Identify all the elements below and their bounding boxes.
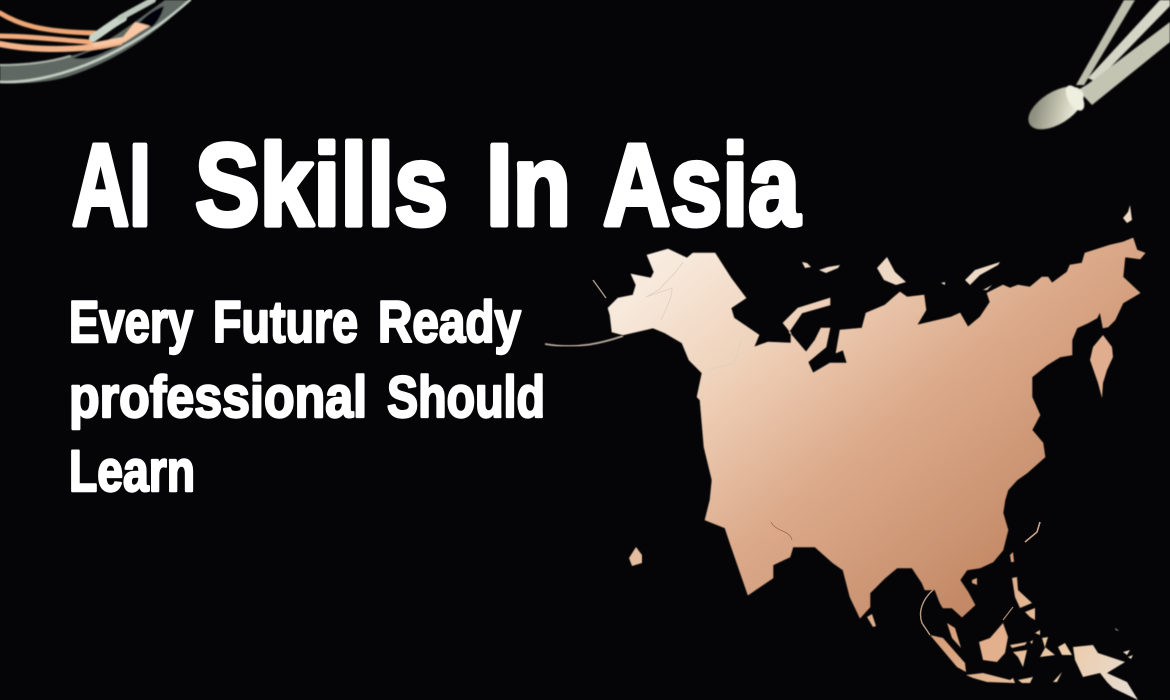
Sakhalin style island [1090,335,1113,398]
small islands near Taiwan and Hainan [972,552,1014,585]
title: Skills [195,120,448,250]
subtitle: Ready [378,290,521,355]
subtitle: Learn [69,439,195,504]
New Guinea [1073,645,1138,700]
map of Asia [545,205,1145,700]
title [72,120,801,250]
Malay Peninsula and Sumatra [930,623,966,672]
decoration: glass tube with orange strands, top left [0,0,190,83]
Madagascar style island [629,547,642,566]
subtitle: Should [387,365,545,430]
subtitle [69,290,545,504]
mainland [608,238,1145,618]
Borneo, Java and other islands [979,623,1008,662]
title: AI [72,120,151,250]
subtitle: professional [69,365,367,430]
title: In [486,120,571,250]
subtitle: Future [213,290,358,355]
decoration: metallic bulb with strands, top right [1021,0,1170,138]
faint borders [646,262,742,370]
subtitle: Every [69,290,193,355]
northern islands [802,205,1132,290]
thin peninsula line [545,336,623,346]
Sri Lanka [867,614,876,627]
title: Asia [603,120,801,250]
